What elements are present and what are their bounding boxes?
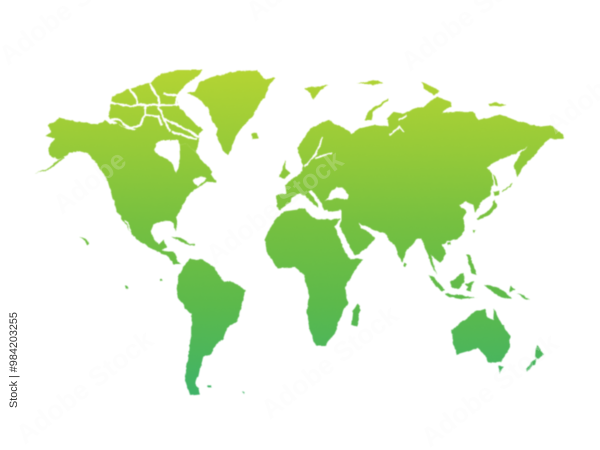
Baltic Sea and Arctic gulfs [305,107,452,167]
Gulf of St Lawrence [193,177,207,186]
South America [125,258,246,395]
Aleutian islands [35,157,65,173]
Europe, Asia and Africa [265,81,563,345]
British Isles [278,160,290,178]
Pacific islands [510,287,530,300]
Caribbean islands [172,237,195,245]
Eurasia [276,97,563,275]
Novaya Zemlya [365,98,388,120]
Taiwan and Hainan [447,229,475,245]
New Guinea [483,285,512,299]
North America and Greenland [35,70,275,264]
Sri Lanka [404,263,407,268]
North American mainland [45,118,217,264]
Southeast Asia and Oceania [428,255,544,373]
watermark: Adobe Stock [255,299,405,425]
Australia [452,308,510,363]
map: all landmasses [35,70,563,395]
watermark: Adobe Stock [200,144,350,270]
small islands [125,279,245,394]
Gulf of California [124,219,133,235]
Greenland [187,70,275,155]
Madagascar [352,303,361,327]
Java and lesser islands [445,293,477,299]
Philippines [467,255,477,275]
Sumatra [428,275,445,292]
Borneo [450,273,465,288]
Severnaya Zemlya [422,82,440,95]
watermark: Adobe [47,144,132,220]
Hawaii [80,237,89,244]
Arctic archipelago [108,70,258,153]
New Siberian Islands [488,103,507,107]
Svalbard [357,81,383,85]
Kuril islands [502,183,512,193]
vertical stock credit text: Stock | #984203255 [8,312,20,408]
watermark: Adobe Stock [415,327,565,450]
Sakhalin [493,173,497,187]
Sulawesi [465,282,475,292]
Africa [265,208,363,345]
New Zealand [527,346,544,372]
Tasmania [497,366,503,373]
South American mainland [177,258,246,395]
Japan [477,190,500,220]
watermark: Adobe Stock [10,324,160,450]
channels between islands [110,83,198,139]
Iceland [305,85,328,100]
